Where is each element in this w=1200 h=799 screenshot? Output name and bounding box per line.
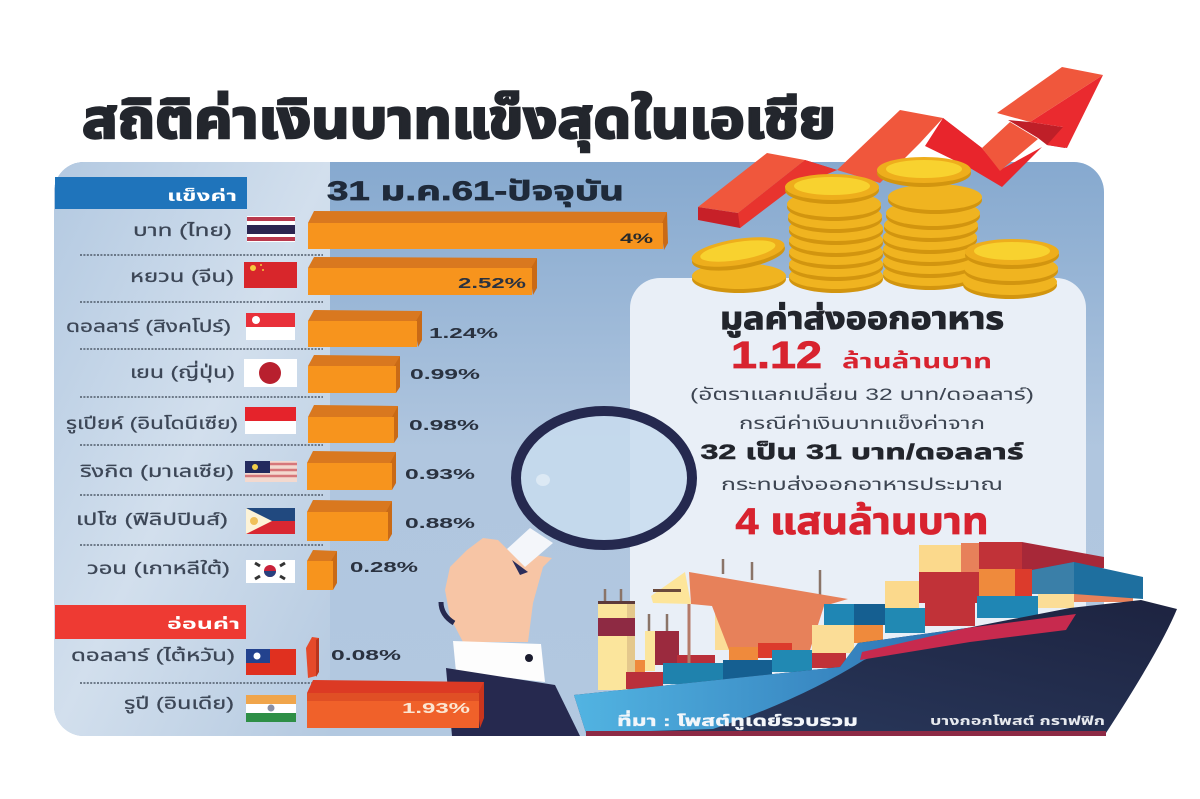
row: Philippines: 0.88% (405, 515, 475, 532)
weakened header (55, 605, 246, 639)
row: Taiwan: 0.08% (331, 647, 401, 664)
row: Thailand (133, 211, 668, 250)
ship hull (574, 600, 1177, 733)
coin pile far right (963, 239, 1059, 299)
scenario line: กรณีค่าเงินบาทแข็งค่าจาก (739, 414, 985, 433)
export value figure: 1.12 (731, 335, 822, 377)
row: China (130, 257, 537, 295)
row: South Korea (87, 550, 418, 590)
row: Taiwan (71, 637, 401, 678)
export value figure: ล้านล้านบาท (842, 351, 992, 373)
row: Thailand: บาท (ไทย) (133, 221, 232, 240)
icon: magnifying glass (507, 411, 692, 575)
background panel (54, 162, 1104, 736)
icon: container ship (574, 542, 1177, 736)
row: Philippines (76, 500, 475, 541)
row: Malaysia: ริงกิต (มาเลเซีย) (80, 462, 234, 481)
row: China: หยวน (จีน) (130, 267, 234, 286)
icon: red rising arrow (698, 67, 1103, 228)
exchange-rate note: (อัตราแลกเปลี่ยน 32 บาท/ดอลลาร์) (690, 382, 1034, 404)
row: Singapore: ดอลลาร์ (สิงคโปร์) (66, 317, 231, 336)
row: Japan: เยน (ญี่ปุ่น) (130, 360, 235, 383)
row: India: 1.93% (402, 700, 470, 717)
row: Indonesia (66, 405, 479, 443)
impact line: กระทบส่งออกอาหารประมาณ (721, 475, 1003, 494)
date heading: 31 ม.ค.61-ปัจจุบัน (327, 176, 624, 207)
container stack (626, 542, 1143, 689)
strengthened header (55, 177, 247, 209)
export value figure (731, 335, 992, 377)
row: Taiwan: ดอลลาร์ (ไต้หวัน) (71, 645, 235, 665)
row: Malaysia: 0.93% (405, 466, 475, 483)
row: China: 2.52% (458, 275, 526, 292)
row: India: รูปี (อินเดีย) (124, 694, 234, 715)
scenario rate: 32 เป็น 31 บาท/ดอลลาร์ (700, 441, 1024, 464)
coin stack right (877, 157, 982, 290)
row: Thailand: 4% (620, 230, 654, 246)
icon: gold coin stacks (690, 157, 1059, 299)
graphic credit: บางกอกโพสต์ กราฟฟิก (930, 714, 1105, 728)
strengthened header: แข็งค่า (167, 187, 237, 205)
row: Indonesia: รูเปียห์ (อินโดนีเซีย) (66, 414, 238, 435)
row: Indonesia: 0.98% (409, 417, 479, 434)
source credit: ที่มา : โพสต์ทูเดย์รวบรวม (617, 710, 858, 731)
row: Singapore (66, 310, 498, 347)
row: Philippines: เปโซ (ฟิลิปปินส์) (76, 510, 228, 529)
icon: hand and sleeve (441, 538, 580, 736)
coin stack centre (785, 174, 883, 293)
coin pile left (690, 232, 787, 293)
row: Malaysia (80, 451, 475, 490)
title: สถิติค่าเงินบาทแข็งสุดในเอเชีย (82, 90, 836, 152)
row: Singapore: 1.24% (429, 325, 498, 342)
row: India (124, 680, 484, 728)
export value text panel (630, 278, 1086, 708)
weakened header: อ่อนค่า (167, 615, 240, 633)
row: Japan (130, 355, 480, 393)
row: South Korea: 0.28% (350, 559, 418, 576)
row: Japan: 0.99% (410, 366, 480, 383)
row: South Korea: วอน (เกาหลีใต้) (87, 558, 230, 578)
ship superstructure and cranes (598, 559, 848, 690)
impact figure: 4 แสนล้านบาท (736, 501, 988, 542)
row dividers (80, 255, 323, 683)
panel heading: มูลค่าส่งออกอาหาร (720, 301, 1004, 337)
